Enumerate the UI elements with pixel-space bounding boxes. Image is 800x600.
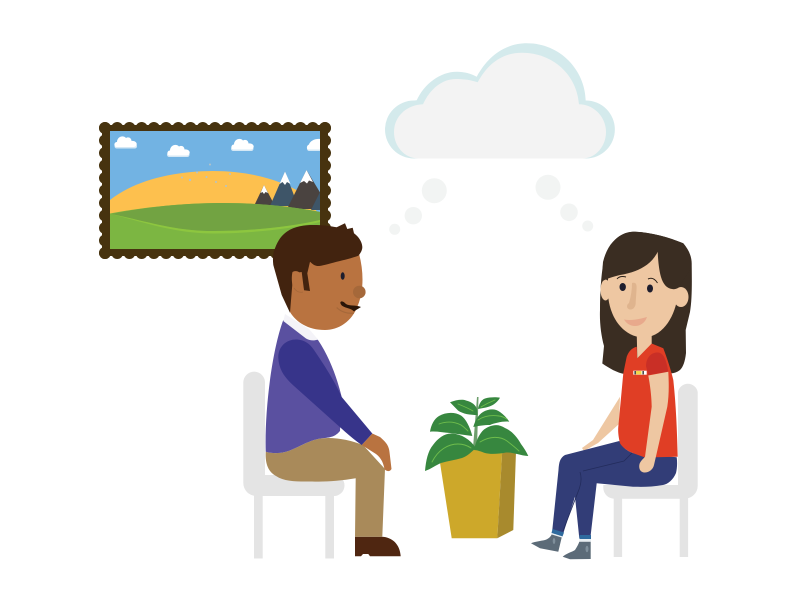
man smile bbox=[337, 308, 354, 313]
woman smile bbox=[624, 317, 647, 326]
birds in picture bbox=[181, 164, 231, 187]
framed landscape picture bbox=[102, 125, 328, 256]
right chair bbox=[603, 384, 698, 557]
woman eyes bbox=[620, 283, 653, 292]
woman cuffs and socks bbox=[551, 529, 591, 542]
stem bbox=[473, 397, 478, 448]
man ear bbox=[292, 271, 304, 293]
woman fringe bbox=[602, 232, 690, 289]
man trousers bbox=[266, 438, 385, 537]
woman nose bbox=[627, 283, 637, 310]
woman left ear bbox=[600, 280, 610, 300]
leaves bbox=[425, 397, 528, 471]
illustration: conversation scene bbox=[99, 43, 698, 560]
woman sleeve bbox=[646, 352, 668, 375]
left chair bbox=[243, 372, 345, 558]
plant in pot bbox=[425, 397, 528, 538]
man face bbox=[290, 250, 362, 330]
pot bbox=[440, 445, 516, 538]
woman eyebrows bbox=[617, 277, 658, 283]
woman shirt bbox=[618, 343, 678, 458]
man sleeve bbox=[278, 339, 372, 445]
leaf veins bbox=[432, 400, 519, 462]
woman jeans bbox=[552, 441, 677, 538]
woman shoes bbox=[531, 534, 591, 559]
landscape bbox=[110, 131, 327, 249]
man seated bbox=[266, 223, 401, 556]
man sweater bbox=[266, 320, 342, 453]
man shoe bbox=[355, 537, 401, 556]
man hand bbox=[362, 434, 392, 471]
thought bubbles bbox=[389, 175, 593, 235]
thought cloud bbox=[385, 43, 615, 158]
clouds in picture bbox=[114, 136, 327, 157]
man collar bbox=[283, 314, 318, 340]
woman seated bbox=[531, 232, 692, 559]
man moustache bbox=[340, 301, 361, 312]
man nose bbox=[353, 286, 366, 298]
man eye bbox=[341, 272, 345, 280]
woman back hair bbox=[600, 232, 692, 374]
woman badge bbox=[633, 371, 647, 375]
picture frame bbox=[102, 125, 328, 256]
woman neck bbox=[637, 332, 652, 358]
woman right ear bbox=[674, 287, 688, 307]
man hair bbox=[273, 223, 362, 313]
woman far arm bbox=[582, 397, 620, 451]
woman face bbox=[608, 245, 678, 338]
woman near arm bbox=[639, 372, 669, 473]
